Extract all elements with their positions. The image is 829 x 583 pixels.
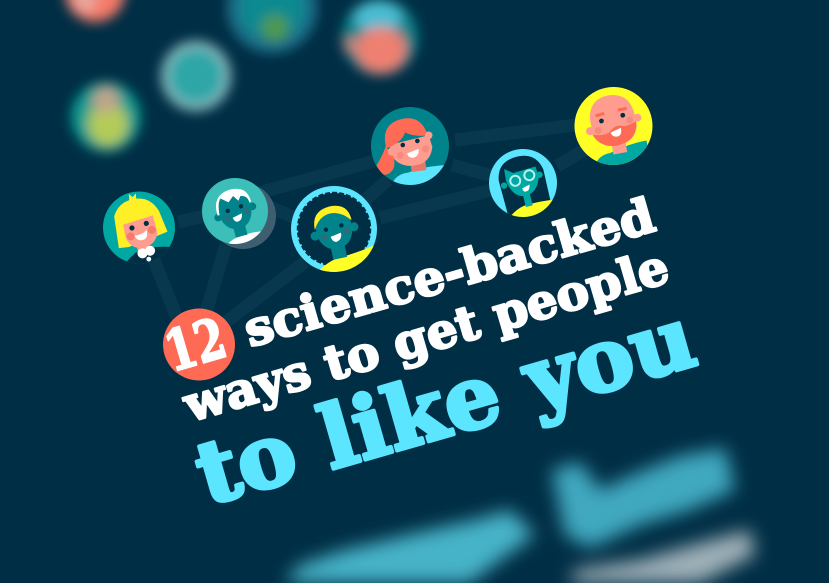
- blurred subheading fragment: [570, 530, 755, 583]
- avatar: bald bearded man: [574, 87, 652, 165]
- title line: ways to get people: ways to get people: [177, 239, 675, 434]
- blurred heading fragment, right: [552, 448, 735, 548]
- blurred avatar: yellow-green: [71, 82, 141, 152]
- network connection lines: [152, 125, 588, 328]
- avatar shadow disc: [210, 183, 276, 249]
- blurred heading fragment, left: [285, 510, 535, 583]
- avatar: afro woman: [291, 186, 377, 272]
- title line: science-backed: science-backed: [238, 188, 661, 359]
- avatar: red-haired woman: [371, 107, 449, 185]
- avatar: boy with white hair and grey shadow: [202, 178, 276, 256]
- blurred avatar: ringed dark: [227, 0, 317, 53]
- avatar: blonde girl: [103, 192, 175, 264]
- blurred avatar: salmon: [65, 0, 125, 22]
- blurred avatar: cyan and salmon: [342, 0, 418, 75]
- blurred avatar: teal: [161, 41, 231, 111]
- blurred continuation text: [285, 448, 755, 583]
- title: [177, 188, 706, 525]
- avatar: woman with glasses: [489, 149, 557, 217]
- badge: number 12: 12: [157, 305, 234, 385]
- blurred background avatars: [65, 0, 418, 152]
- title line: to like you: to like you: [185, 287, 706, 525]
